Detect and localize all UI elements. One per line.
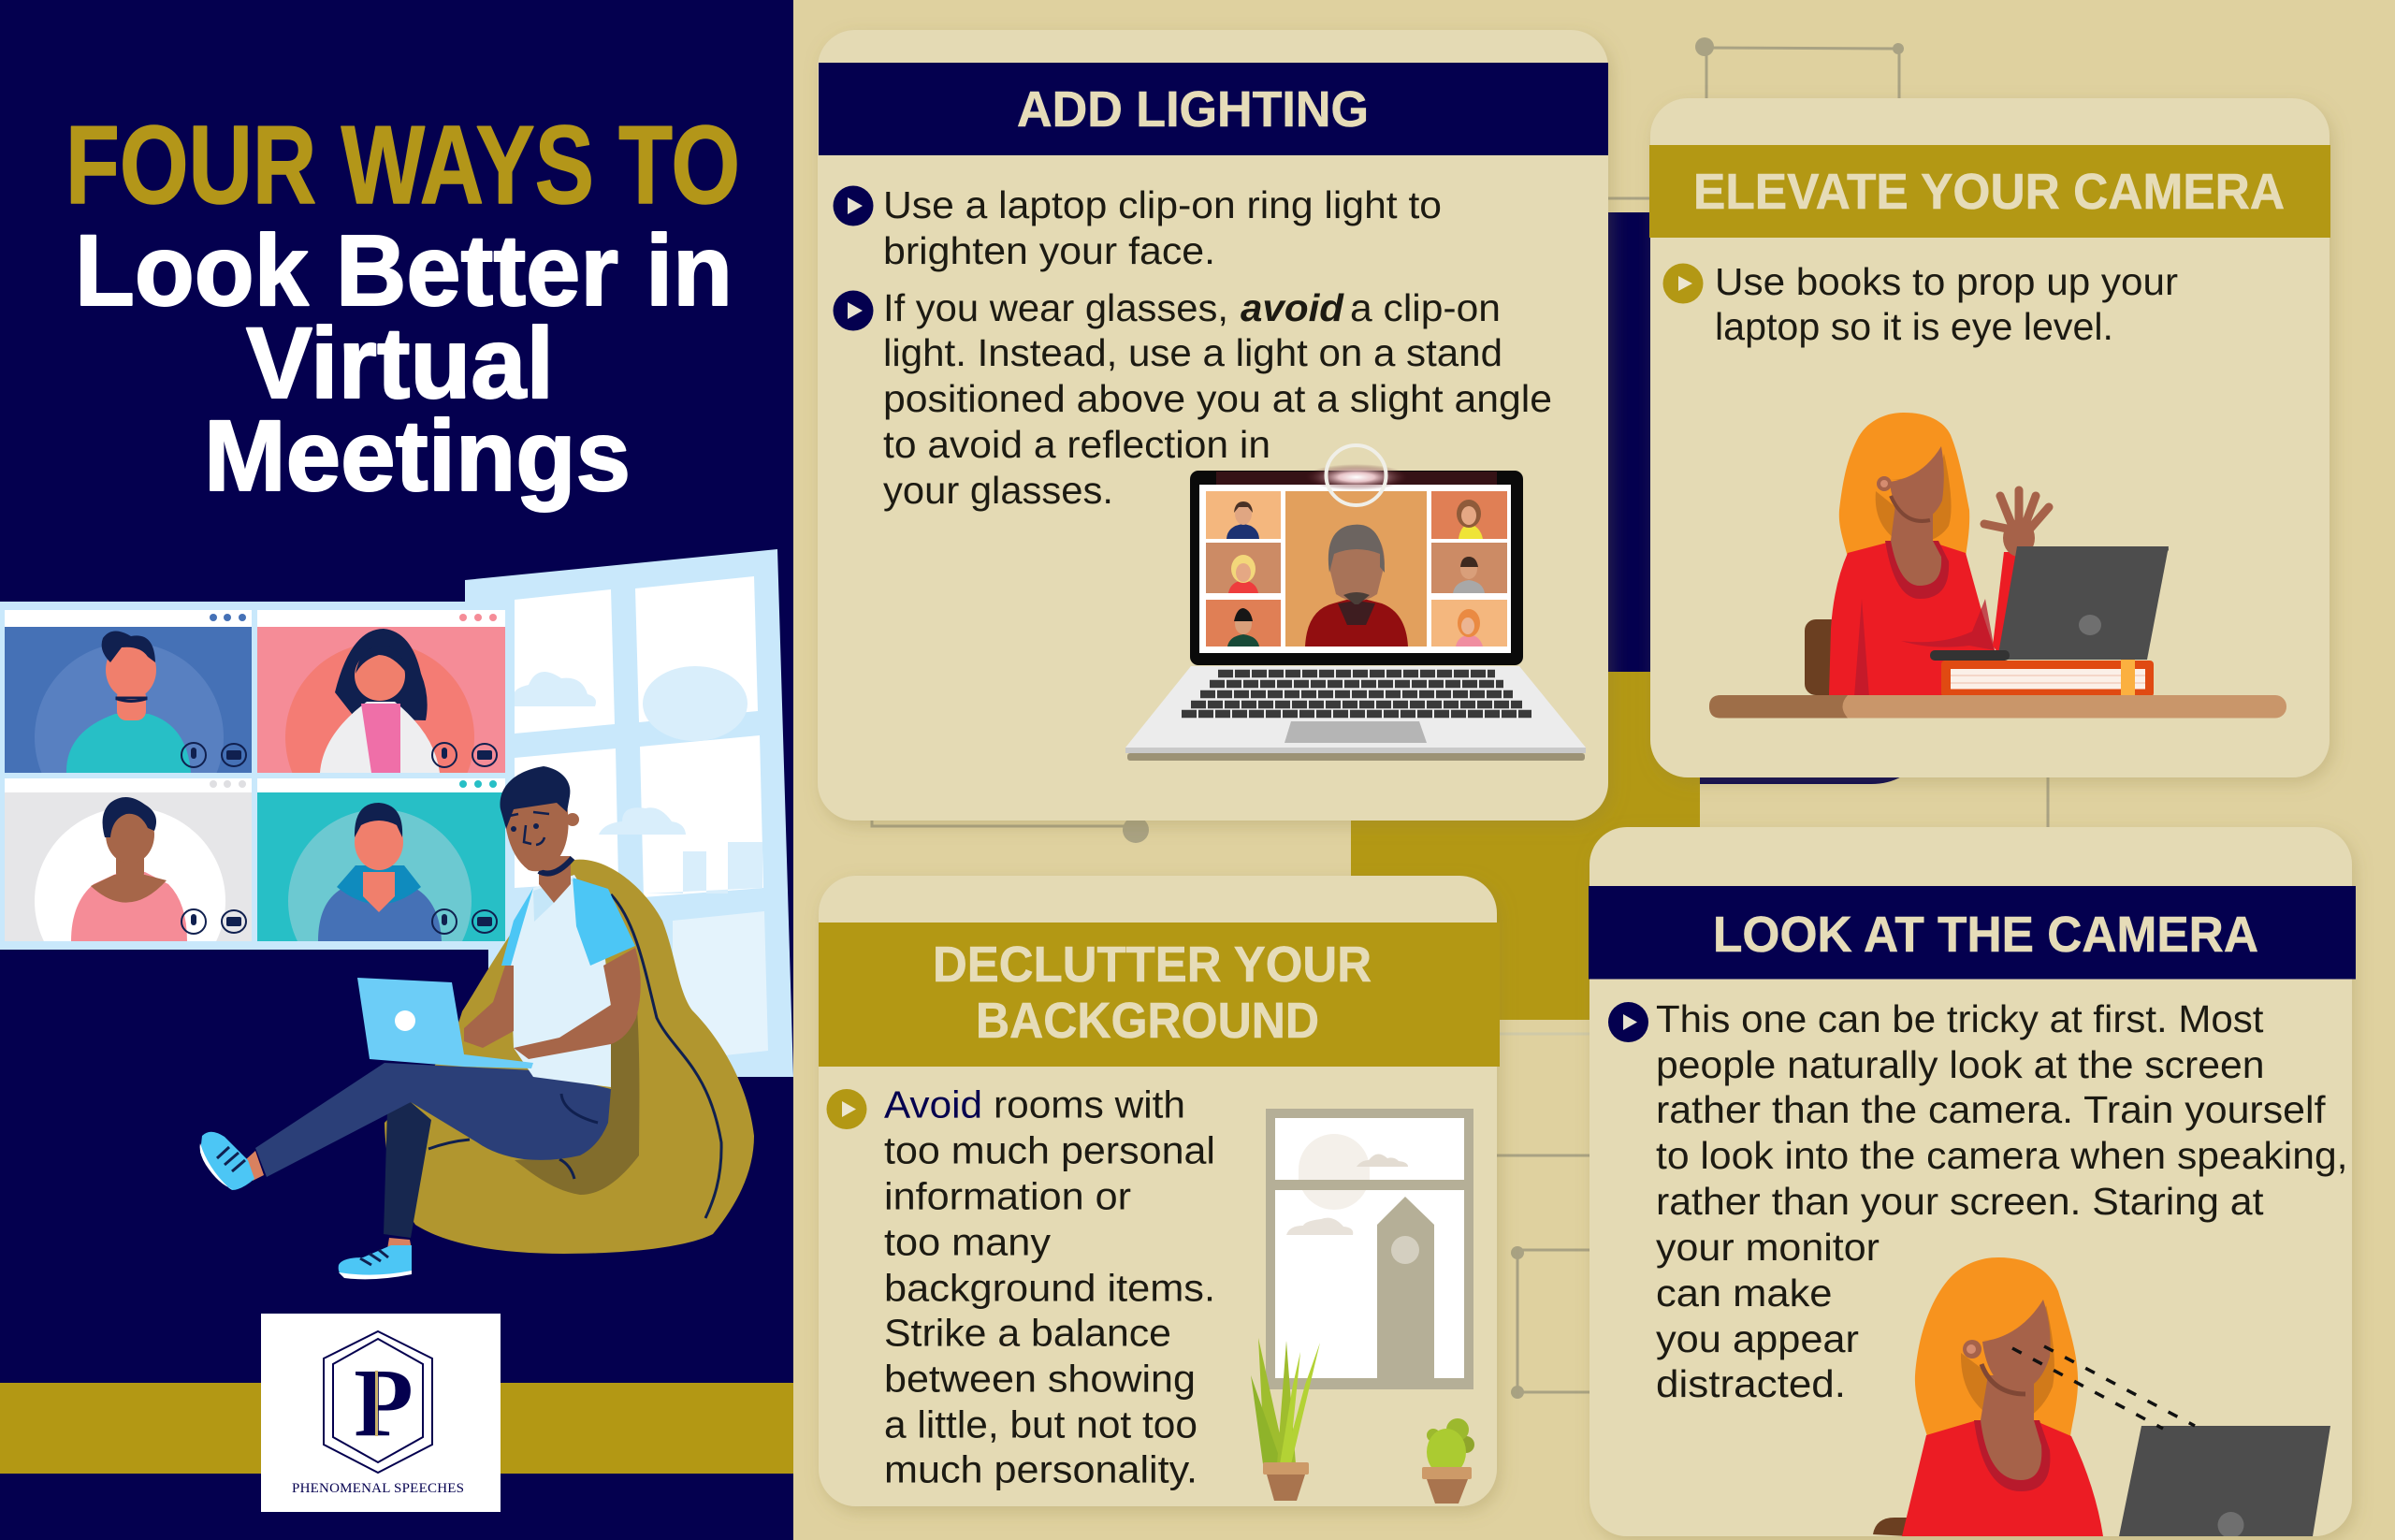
text: prop up laptop: Use books to prop up your (1715, 260, 2178, 303)
text: train yourself: This one can be tricky at first. Most (1656, 997, 2264, 1040)
panel: look at the camera (1589, 827, 2356, 1538)
video tile 4 (257, 778, 505, 941)
heading: add lighting (819, 63, 1608, 155)
back leg (384, 1102, 431, 1238)
bullet icon (833, 185, 874, 226)
text: avoid rooms: much personality. (884, 1448, 1198, 1491)
video tile 1 (5, 610, 252, 773)
shoe front (245, 1151, 264, 1181)
illustration: laptop with ring light (1125, 445, 1586, 761)
text: avoid rooms: too much personal (884, 1128, 1215, 1171)
text: glasses tip (883, 286, 1552, 512)
heading: declutter your background: BACKGROUND (976, 993, 1319, 1049)
title (65, 103, 740, 512)
logo (261, 1314, 501, 1512)
text: train yourself: your monitor (1656, 1226, 1880, 1269)
text: avoid rooms: Strike a balance (884, 1312, 1171, 1355)
text: avoid rooms: information or (884, 1175, 1131, 1218)
illustration: window with tower (1266, 1109, 1473, 1389)
gold band (0, 1383, 793, 1474)
illustration: woman looking at camera (1873, 1257, 2330, 1538)
beanbag (385, 860, 754, 1254)
text: glasses tip: positioned above you at a slight angle (883, 377, 1552, 420)
text: glasses tip: avoid (1241, 286, 1344, 329)
text: avoid rooms: background items. (884, 1267, 1215, 1310)
text: train yourself: distracted. (1656, 1362, 1846, 1405)
text: glasses tip: a clip-on (1350, 286, 1501, 329)
central participant (1305, 525, 1408, 647)
head (501, 766, 579, 903)
shoe rear (387, 1238, 412, 1249)
heading: elevate your camera (1649, 145, 2330, 238)
illustration: video call grid (0, 602, 505, 950)
title: Look Better in (75, 213, 733, 327)
text: avoid rooms: a little, but not too (884, 1403, 1198, 1446)
panel: elevate your camera (1649, 98, 2330, 777)
illustration: cactus (1422, 1418, 1474, 1504)
text: train yourself: rather than the camera. Train yourself (1656, 1088, 2326, 1131)
bullet icon (1663, 264, 1703, 303)
panel: add lighting (818, 30, 1608, 821)
text: glasses tip: your glasses. (883, 469, 1113, 512)
text: train yourself (1656, 997, 2348, 1405)
text: prop up laptop: laptop so it is eye level. (1715, 305, 2113, 348)
text: avoid rooms: too many (884, 1220, 1052, 1263)
panel: left navy title panel (0, 0, 793, 1540)
title: FOUR WAYS TO (65, 103, 740, 227)
heading: add lighting: ADD LIGHTING (1017, 81, 1369, 138)
text: avoid rooms: rooms with (994, 1083, 1185, 1126)
logo: P (354, 1349, 414, 1457)
logo: PHENOMENAL SPEECHES (292, 1481, 464, 1496)
illustration: woman with laptop on books (1709, 413, 2286, 719)
panel: declutter your background (819, 876, 1500, 1506)
bullet icon (833, 290, 874, 331)
video tile 3 (5, 778, 252, 941)
text: train yourself: you appear (1656, 1317, 1859, 1360)
text: train yourself: rather than your screen. Staring at (1656, 1180, 2264, 1223)
illustration: potted plant (1251, 1338, 1320, 1501)
bullet icon (1608, 1002, 1648, 1042)
text: avoid rooms: Avoid (884, 1083, 982, 1126)
torso (511, 875, 611, 1087)
laptop (357, 978, 533, 1068)
video tile 2 (257, 610, 505, 773)
text: ring light tip: Use a laptop clip-on ring light to (883, 183, 1442, 226)
heading: declutter your background (819, 923, 1500, 1067)
text: glasses tip: light. Instead, use a light on a stand (883, 331, 1502, 374)
heading: declutter your background: DECLUTTER YOUR (933, 937, 1372, 993)
illustration: person on beanbag with laptop (200, 766, 754, 1279)
text: train yourself: people naturally look at the screen (1656, 1043, 2264, 1086)
illustration: window (465, 549, 793, 1077)
title: Meetings (204, 399, 631, 512)
text: train yourself: can make (1656, 1271, 1832, 1315)
text: ring light tip: brighten your face. (883, 229, 1215, 272)
ring light (1327, 445, 1386, 505)
text: prop up laptop (1715, 260, 2178, 348)
title: Virtual (246, 306, 554, 419)
bullet icon (827, 1089, 866, 1129)
heading: look at the camera: LOOK AT THE CAMERA (1713, 907, 2258, 963)
text: train yourself: to look into the camera when speaking, (1656, 1134, 2348, 1177)
text: avoid rooms (884, 1083, 1215, 1491)
background decoration: blocks and connector lines (872, 37, 2048, 1399)
text: ring light tip (883, 183, 1442, 272)
mini participants (1227, 500, 1485, 647)
text: glasses tip: to avoid a reflection in (883, 423, 1270, 466)
heading: elevate your camera: ELEVATE YOUR CAMERA (1693, 164, 2285, 220)
leg front (255, 1063, 611, 1177)
sleeves (573, 878, 635, 966)
text: avoid rooms: between showing (884, 1357, 1196, 1400)
text: glasses tip: If you wear glasses, (883, 286, 1228, 329)
arms (514, 948, 641, 1059)
heading: look at the camera (1589, 886, 2356, 979)
